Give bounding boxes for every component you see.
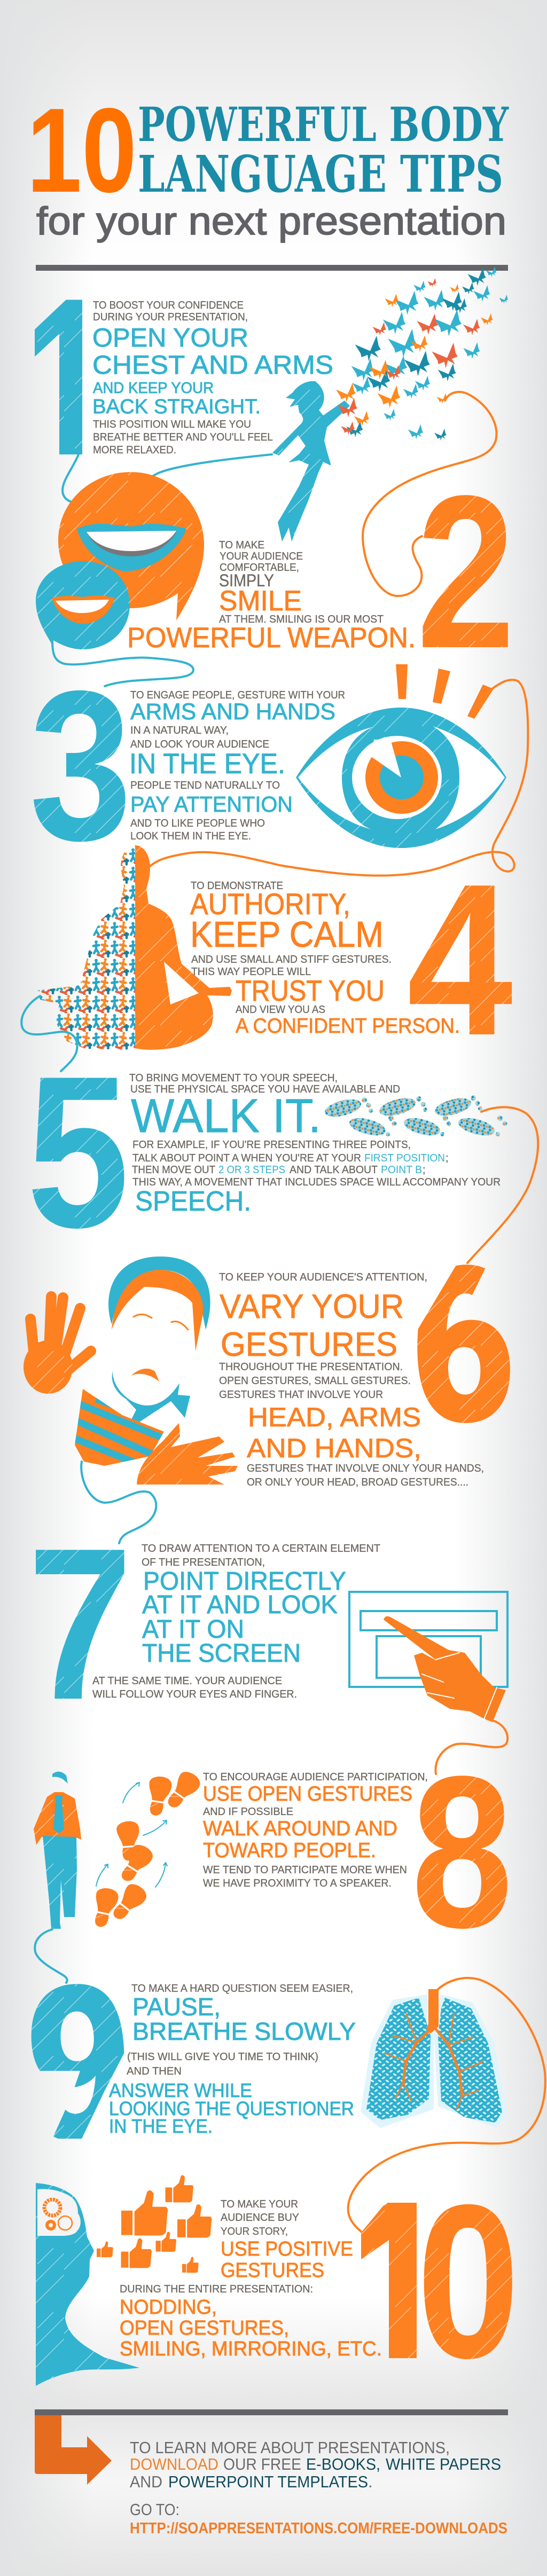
numeral 10: 0 <box>417 2159 520 2404</box>
numeral 1: 1 <box>19 258 111 500</box>
tip 10 text: DURING THE ENTIRE PRESENTATION: <box>120 2283 313 2295</box>
tip 6 text: OPEN GESTURES, SMALL GESTURES. <box>219 1375 411 1387</box>
tip 6 text: GESTURES THAT INVOLVE YOUR <box>219 1389 383 1401</box>
tip 10 text: USE POSITIVE <box>221 2238 353 2260</box>
tip 5 text: 2 OR 3 STEPS <box>218 1164 285 1176</box>
tip 1 text: DURING YOUR PRESENTATION, <box>93 311 248 323</box>
connector: 6 to 7 <box>81 1462 156 1543</box>
tip 6 <box>24 1256 510 1487</box>
tip 4 text: KEEP CALM <box>190 914 384 955</box>
tip 6 text: GESTURES <box>221 1326 397 1363</box>
tip 5 text: THEN MOVE OUT <box>132 1164 215 1176</box>
tip 8 text: AND IF POSSIBLE <box>203 1806 293 1818</box>
tip 7 text: AT IT AND LOOK <box>142 1591 338 1619</box>
numeral 10: 1 <box>345 2160 450 2405</box>
tip 5 text: FOR EXAMPLE, IF YOU'RE PRESENTING THREE POINTS, <box>132 1139 411 1151</box>
tip 2 text: TO MAKE <box>219 539 264 551</box>
tip 10 text: TO MAKE YOUR <box>221 2198 298 2210</box>
tip 3 text: PEOPLE TEND NATURALLY TO <box>130 780 280 791</box>
tip 9 text: LOOKING THE QUESTIONER <box>109 2098 354 2119</box>
icon: meditating figure <box>32 844 232 1052</box>
tip 4 text: THIS WAY PEOPLE WILL <box>191 966 311 978</box>
tip 10 text: AUDIENCE BUY <box>221 2212 299 2224</box>
tip 4 text: AUTHORITY, <box>190 887 350 921</box>
tip 3 text: ARMS AND HANDS <box>130 699 335 725</box>
title: 10 <box>27 83 137 217</box>
butterflies <box>336 266 510 442</box>
tip 3 text: IN A NATURAL WAY, <box>130 725 229 736</box>
tip 6 text: THROUGHOUT THE PRESENTATION. <box>219 1361 403 1373</box>
footer text: OUR FREE <box>223 2455 301 2473</box>
tip 4 text: AND VIEW YOU AS <box>236 1004 325 1016</box>
tip 9 text: IN THE EYE. <box>109 2115 213 2137</box>
footer text <box>130 2438 507 2537</box>
numeral 8: 8 <box>411 1731 513 1973</box>
tip 1 text: THIS POSITION WILL MAKE YOU <box>93 419 251 430</box>
tip 3 text <box>129 689 345 842</box>
connector: 1 to 2 <box>363 392 496 596</box>
tip 1 <box>19 258 510 541</box>
tip 6 text: GESTURES THAT INVOLVE ONLY YOUR HANDS, <box>247 1463 484 1474</box>
tip 7 text: AT THE SAME TIME. YOUR AUDIENCE <box>92 1675 282 1687</box>
tip 9 text: TO MAKE A HARD QUESTION SEEM EASIER, <box>131 1983 353 1994</box>
tip 4 text: AND USE SMALL AND STIFF GESTURES. <box>191 954 392 965</box>
connector: 8 to 9 <box>35 1929 67 1983</box>
tip 5 text: THIS WAY, A MOVEMENT THAT INCLUDES SPACE WILL ACCOMPANY YOUR <box>132 1176 501 1188</box>
tip 3 text: PAY ATTENTION <box>130 792 293 816</box>
tip 4 <box>37 845 512 1050</box>
jumping girl silhouette <box>272 381 350 541</box>
footer text: HTTP://SOAPPRESENTATIONS.COM/FREE-DOWNLOADS <box>130 2520 507 2537</box>
numeral 5: 5 <box>27 1031 129 1273</box>
tip 9 text: ANSWER WHILE <box>109 2079 252 2101</box>
numeral 4: 4 <box>407 838 514 1080</box>
tip 6 text: TO KEEP YOUR AUDIENCE'S ATTENTION, <box>219 1271 427 1283</box>
connector: 7 to 8 <box>435 1719 507 1774</box>
tip 8 text: WE HAVE PROXIMITY TO A SPEAKER. <box>203 1878 392 1889</box>
tip 9 text: (THIS WILL GIVE YOU TIME TO THINK) <box>127 2051 318 2063</box>
tip 10 <box>36 2159 520 2405</box>
tip 1 text: MORE RELAXED. <box>93 444 176 456</box>
tip 2 <box>36 451 515 694</box>
tip 5 text: ; <box>423 1164 426 1176</box>
title <box>27 83 509 243</box>
tip 4 text: TO DEMONSTRATE <box>191 880 283 892</box>
tip 7 text: THE SCREEN <box>142 1639 301 1668</box>
tip 5 text: TO BRING MOVEMENT TO YOUR SPEECH, <box>129 1072 338 1084</box>
footer text: WHITE PAPERS <box>386 2455 501 2473</box>
tip 6 text: OR ONLY YOUR HEAD, BROAD GESTURES.... <box>247 1477 468 1488</box>
tip 2 text: YOUR AUDIENCE <box>220 551 303 562</box>
tip 2 text: POWERFUL WEAPON. <box>127 622 416 654</box>
icon: eye <box>296 664 506 848</box>
tip 3 <box>29 646 506 885</box>
tip 8 <box>34 1731 513 1973</box>
tip 3 text: AND TO LIKE PEOPLE WHO <box>130 818 265 829</box>
footer arrow <box>35 2415 112 2485</box>
connector: 3 to 4 <box>150 680 528 876</box>
tip 7 text: WILL FOLLOW YOUR EYES AND FINGER. <box>92 1688 297 1700</box>
tip 10 text: OPEN GESTURES, <box>120 2317 289 2339</box>
tip 8 text: TO ENCOURAGE AUDIENCE PARTICIPATION, <box>203 1771 428 1783</box>
tip 2 text: SIMPLY <box>219 571 274 590</box>
footer text: E-BOOKS, <box>306 2455 380 2473</box>
numeral 9: 9 <box>27 1941 129 2183</box>
icon: gesturing man <box>24 1256 238 1485</box>
orange speech bubble with smile <box>58 472 204 621</box>
tip 10 text: GESTURES <box>221 2259 324 2282</box>
title: for your next presentation <box>36 200 506 243</box>
connector: 5 to 6 <box>467 1107 538 1263</box>
tip 10 text: NODDING, <box>120 2296 217 2319</box>
tip 8 text: WALK AROUND AND <box>203 1817 397 1840</box>
tip 3 text: IN THE EYE. <box>129 748 285 780</box>
footer text: DOWNLOAD <box>130 2455 218 2473</box>
numeral 7: 7 <box>28 1503 132 1745</box>
tip 5 <box>27 1031 507 1273</box>
icon: lungs <box>361 1989 507 2128</box>
tip 7 text: AT IT ON <box>142 1615 244 1644</box>
tip 5 text: ; <box>446 1152 449 1164</box>
teal speech bubble with smile <box>36 561 130 649</box>
tip 5 text <box>129 1072 501 1217</box>
tip 4 text: A CONFIDENT PERSON. <box>236 1015 460 1038</box>
jump rope line <box>62 454 272 504</box>
tip 9 text: BREATHE SLOWLY <box>132 2017 356 2045</box>
numeral 6: 6 <box>413 1222 514 1464</box>
tip 5 text: POINT B <box>381 1164 422 1176</box>
tip 3 text: TO ENGAGE PEOPLE, GESTURE WITH YOUR <box>130 689 345 701</box>
tip 7 <box>28 1503 507 1745</box>
tip 10 text: SMILING, MIRRORING, ETC. <box>120 2338 382 2360</box>
footer text: TO LEARN MORE ABOUT PRESENTATIONS, <box>130 2438 450 2457</box>
tip 9 text <box>109 1983 356 2137</box>
tip 8 text: WE TEND TO PARTICIPATE MORE WHEN <box>203 1864 407 1876</box>
tip 8 text <box>203 1771 428 1889</box>
icon: head with thumbs up <box>36 2175 212 2386</box>
tip 5 text: SPEECH. <box>135 1186 251 1217</box>
tip 1 text: OPEN YOUR <box>92 324 248 352</box>
numeral 10 <box>361 2203 512 2359</box>
tip 1 text: AND KEEP YOUR <box>93 380 214 397</box>
tip 1 text: CHEST AND ARMS <box>92 351 333 380</box>
footer text: AND <box>130 2472 162 2491</box>
connector: 9 to 10 <box>348 1978 545 2232</box>
tip 8 text: TOWARD PEOPLE. <box>203 1839 376 1862</box>
tip 7 text <box>92 1543 380 1700</box>
icon: orange shoe prints and arrows <box>90 1768 203 1929</box>
tip 3 text: AND LOOK YOUR AUDIENCE <box>130 739 269 750</box>
tip 5 text: WALK IT. <box>131 1089 321 1142</box>
numeral 2: 2 <box>417 451 515 694</box>
tip 7 text: TO DRAW ATTENTION TO A CERTAIN ELEMENT <box>142 1543 380 1554</box>
tip 10 text <box>120 2198 382 2360</box>
tip 6 text: HEAD, ARMS <box>248 1402 421 1432</box>
icon: dotted footprints <box>323 1095 507 1139</box>
tip 2 text <box>127 539 416 654</box>
tip 4 text <box>190 880 460 1038</box>
tip 7 text: POINT DIRECTLY <box>143 1567 346 1596</box>
tip 9 text: AND THEN <box>127 2065 182 2077</box>
tip 5 text: AND TALK ABOUT <box>290 1164 378 1176</box>
tip 1 text: BREATHE BETTER AND YOU'LL FEEL <box>93 431 273 443</box>
tip 1 text: TO BOOST YOUR CONFIDENCE <box>93 300 244 311</box>
tip 7 text: OF THE PRESENTATION, <box>142 1557 265 1568</box>
tip 10 text: YOUR STORY, <box>221 2226 288 2237</box>
tip 4 text: TRUST YOU <box>236 974 385 1007</box>
footer text: . <box>368 2472 373 2491</box>
tip 2 text: AT THEM. SMILING IS OUR MOST <box>219 614 384 625</box>
tip 9 text: PAUSE, <box>132 1993 221 2021</box>
icon: standing man <box>34 1772 81 1929</box>
tip 2 text: COMFORTABLE, <box>220 562 299 574</box>
numeral 3: 3 <box>29 646 132 885</box>
tip 1 text <box>92 300 333 456</box>
tip 9 <box>27 1941 507 2183</box>
tip 8 text: USE OPEN GESTURES <box>203 1782 412 1805</box>
connector: 4 to 5 <box>21 996 77 1071</box>
tip 5 text: FIRST POSITION <box>364 1152 445 1164</box>
connector: 2 to 3 <box>52 641 193 686</box>
icon: screen with pointing hand <box>349 1592 507 1722</box>
tip 2 text: SMILE <box>219 585 302 617</box>
tip 5 text: USE THE PHYSICAL SPACE YOU HAVE AVAILABLE AND <box>130 1083 400 1095</box>
tip 6 text: VARY YOUR <box>220 1288 404 1325</box>
footer text: GO TO: <box>130 2500 179 2519</box>
footer text: POWERPOINT TEMPLATES <box>168 2472 368 2491</box>
tip 5 text: TALK ABOUT POINT A WHEN YOU'RE AT YOUR <box>132 1152 361 1164</box>
tip 6 text <box>219 1271 484 1488</box>
tip 3 text: LOOK THEM IN THE EYE. <box>130 830 251 842</box>
tip 6 text: AND HANDS, <box>247 1433 421 1463</box>
tip 1 text: BACK STRAIGHT. <box>92 396 261 418</box>
